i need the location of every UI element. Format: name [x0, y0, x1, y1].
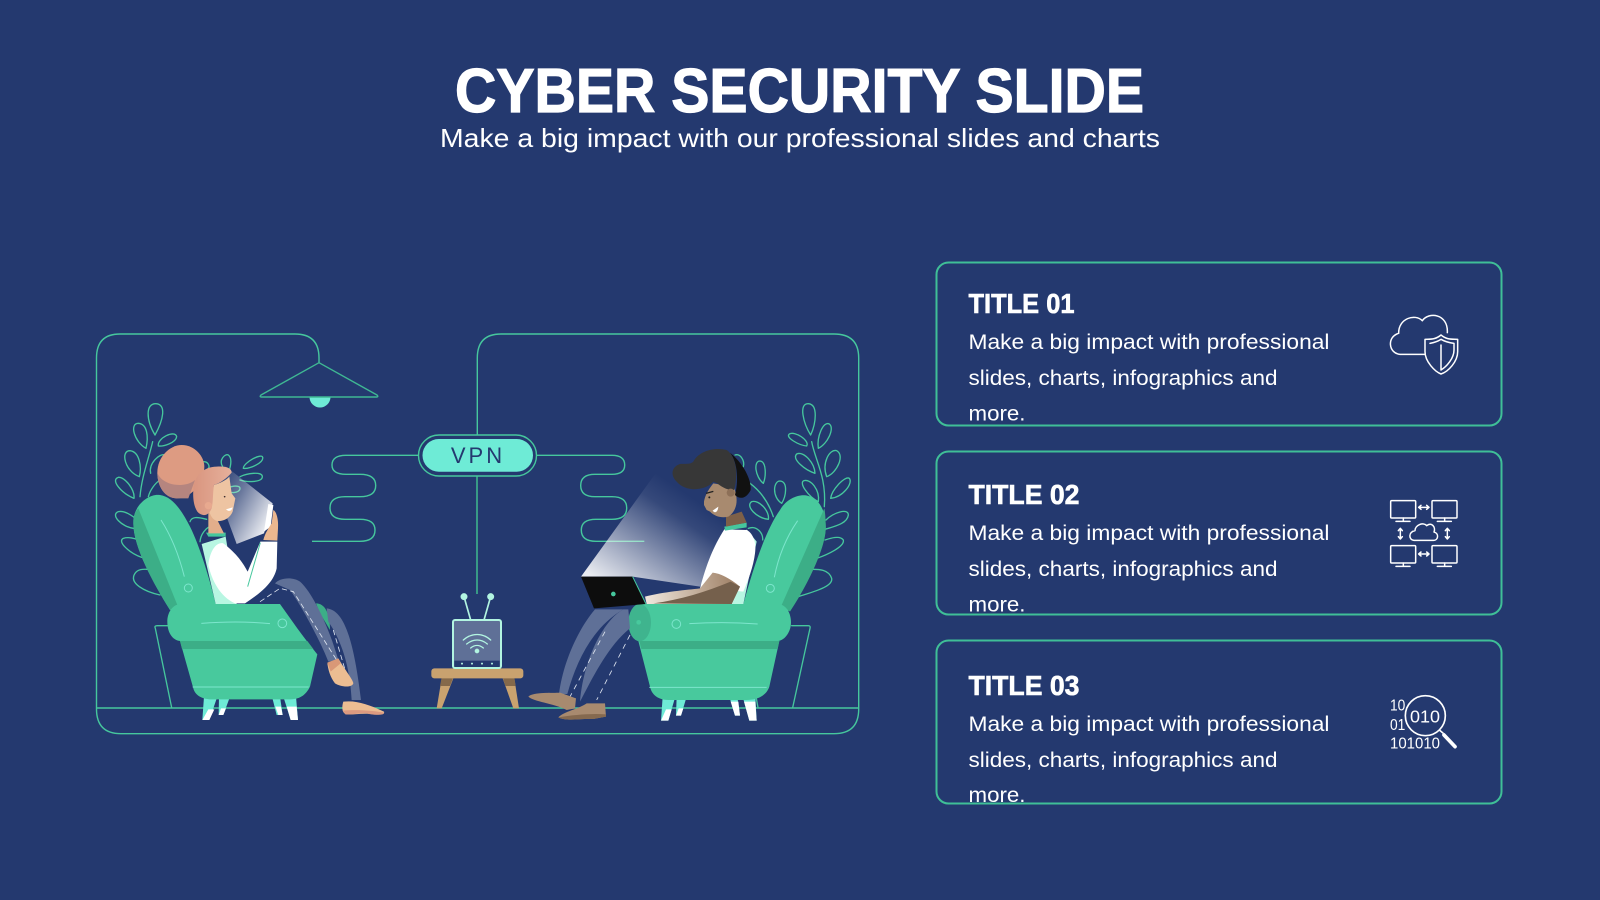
- text block 02: slides, charts, infographics and: [968, 558, 1278, 581]
- head: [673, 449, 751, 527]
- chair side outline: [155, 626, 172, 708]
- icon: binary magnifier: [1390, 696, 1455, 752]
- wifi symbol: [463, 634, 491, 653]
- phone light beam: [201, 447, 273, 544]
- torso: [202, 533, 277, 604]
- icon: cloud shield: [1390, 315, 1458, 374]
- antennas: [461, 594, 493, 620]
- feet: [327, 658, 384, 715]
- left plant: [116, 404, 263, 595]
- router body: [453, 620, 501, 668]
- room frame outline: [96, 334, 859, 734]
- VPN badge: [418, 435, 536, 476]
- laptop: [581, 577, 646, 608]
- text block 02: more.: [968, 594, 1026, 616]
- text block 03: Make a big impact with professional: [968, 713, 1330, 736]
- right figure: man with laptop: [528, 404, 850, 721]
- text block 03: slides, charts, infographics and: [968, 749, 1278, 772]
- router lights: [461, 663, 493, 665]
- illustration: VPN scene: [96, 334, 859, 734]
- text block 02: Make a big impact with professional: [968, 522, 1330, 545]
- icon: binary magnifier: 101010: [1390, 735, 1440, 752]
- torso: [700, 523, 757, 604]
- table: [431, 668, 523, 708]
- network line right: [537, 455, 644, 541]
- armchair: [628, 495, 826, 721]
- text block 01: slides, charts, infographics and: [968, 367, 1278, 390]
- heading 01: TITLE 01: [968, 288, 1074, 319]
- laptop light beam: [581, 443, 733, 587]
- armchair: [133, 495, 330, 720]
- hair bun: [157, 445, 204, 498]
- icon: binary magnifier: 01: [1390, 717, 1405, 734]
- connector line VPN to router: [476, 476, 478, 594]
- ceiling lamp: [260, 363, 378, 408]
- arm: [645, 573, 740, 604]
- right plant: [735, 404, 850, 597]
- heading 02: TITLE 02: [968, 479, 1080, 510]
- head: [193, 467, 235, 533]
- icon: network of computers: [1391, 501, 1457, 566]
- icon: binary magnifier: 10: [1390, 698, 1405, 715]
- title: CYBER SECURITY SLIDE: [455, 57, 1144, 126]
- network line left: [312, 455, 418, 541]
- icon: binary magnifier: 010: [1410, 707, 1440, 727]
- text block 01: Make a big impact with professional: [968, 331, 1330, 354]
- panel: title 03: [936, 640, 1502, 807]
- shoes: [528, 693, 606, 720]
- trousers: [260, 578, 361, 700]
- router on table: [431, 594, 523, 708]
- panel: title 01: [936, 262, 1502, 426]
- text block 01: [968, 331, 1330, 426]
- left figure: woman in armchair: [116, 404, 384, 720]
- text block 03: more.: [968, 784, 1026, 807]
- trousers: [559, 609, 630, 702]
- text block 01: more.: [968, 402, 1026, 426]
- chair side outline: [756, 626, 810, 708]
- text block 02: [968, 522, 1330, 616]
- phone and hand: [263, 504, 278, 541]
- panel: title 02: [936, 452, 1502, 616]
- subtitle: Make a big impact with our professional slides and charts: [440, 123, 1160, 153]
- heading 03: TITLE 03: [968, 670, 1080, 701]
- text block 03: [968, 713, 1330, 807]
- VPN badge: VPN: [451, 443, 505, 468]
